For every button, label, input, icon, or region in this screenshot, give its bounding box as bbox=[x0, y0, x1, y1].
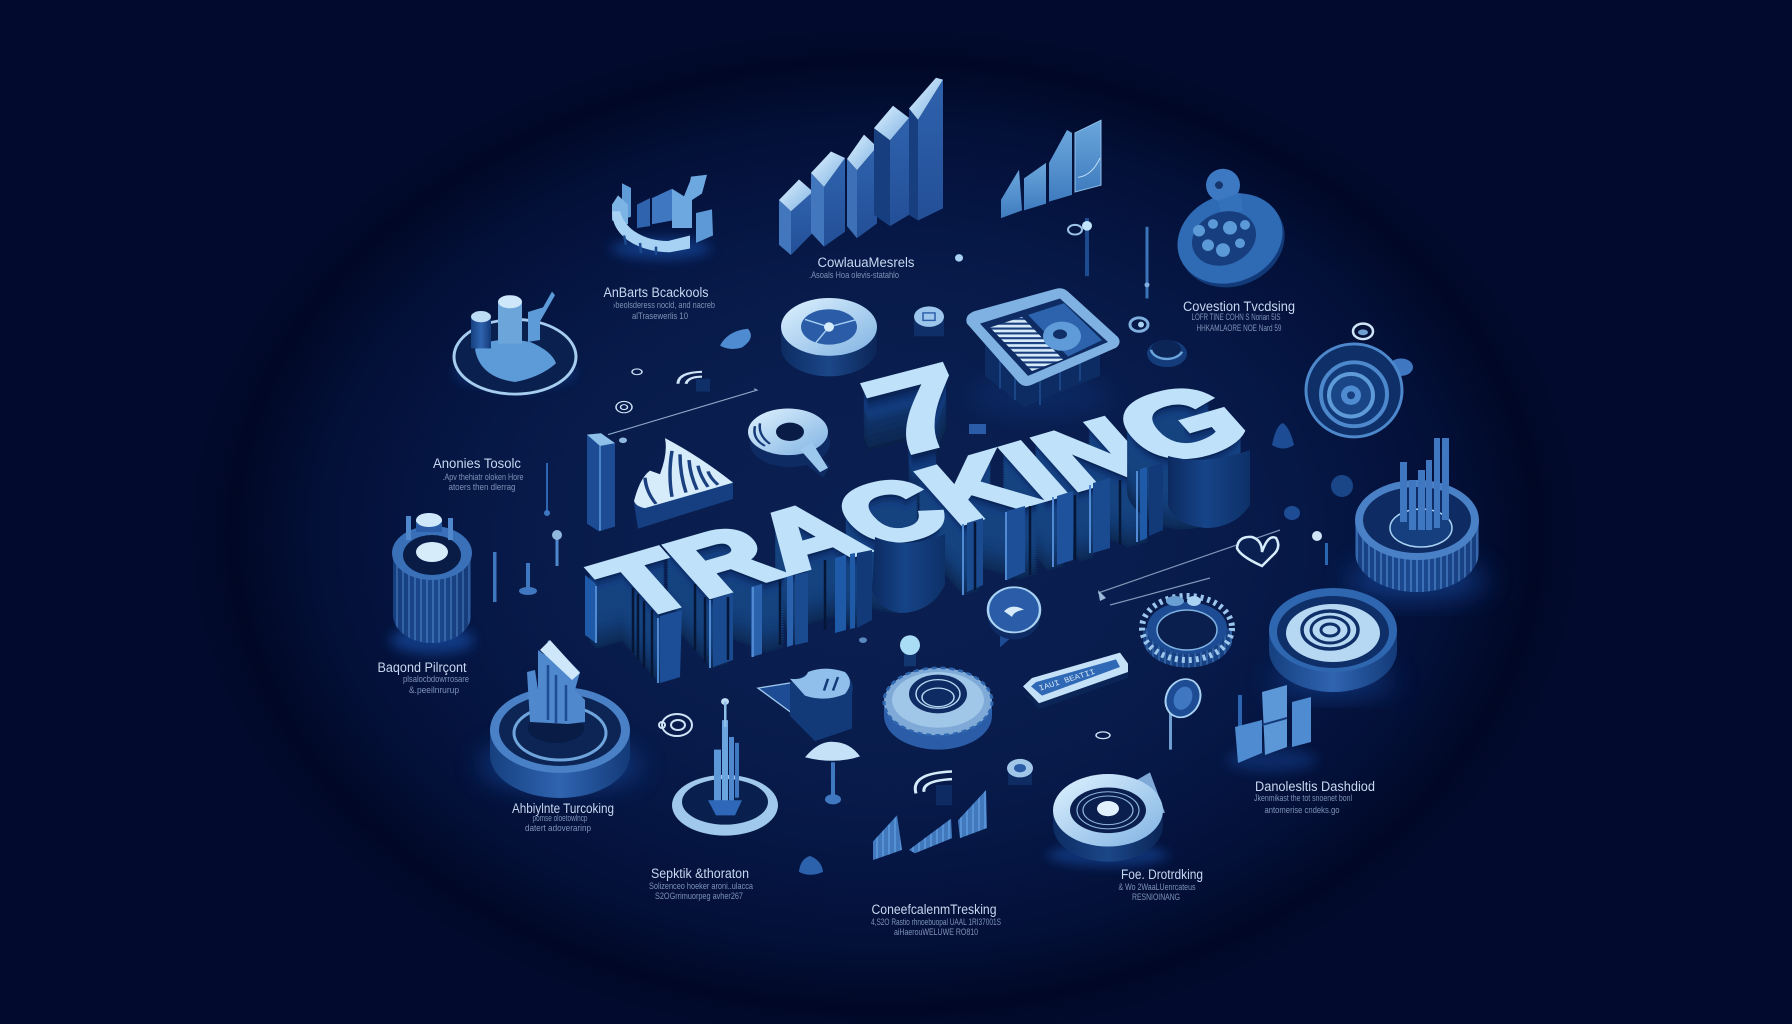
label: brand pilot: plsalocbdowrrosare bbox=[403, 674, 469, 685]
label: brand pilot bbox=[378, 660, 469, 696]
icon: alarm target bbox=[1306, 324, 1413, 437]
label: conversion metrics: .Asoals Hoa olevis-statahlo bbox=[809, 270, 899, 281]
title: 7 Tracking: 7 bbox=[846, 340, 992, 482]
label: foe drotrdking bbox=[1118, 867, 1203, 903]
label: anomaly tools: .Apv thehiatr oloken Hore bbox=[442, 472, 524, 483]
icon: arrow flag bbox=[758, 669, 853, 741]
label: backlinks: ›beolsderess nocld, and nacreb bbox=[613, 300, 715, 311]
icon: small panel bar chart bbox=[1001, 120, 1101, 218]
icon: ring with crystal tower bbox=[480, 640, 640, 798]
label: analytics dashboard bbox=[1254, 779, 1375, 816]
icon: magnifier Q bbox=[748, 409, 830, 478]
icon: dots and droplet right bbox=[1272, 423, 1353, 565]
icon: needle lines and heart ring bbox=[1098, 530, 1280, 605]
icon: spiral bbox=[659, 714, 692, 736]
label: foe drotrdking: RESNIOINANG bbox=[1132, 892, 1180, 903]
icon: small cylinder top bbox=[914, 254, 963, 336]
icon: device panel bbox=[966, 288, 1120, 413]
icon: lollipop and small oval bbox=[1096, 676, 1205, 750]
icon: tower with hook line bbox=[587, 389, 757, 531]
label: foe drotrdking: Foe. Drotrdking bbox=[1121, 867, 1203, 882]
icon: donut chart bbox=[781, 298, 877, 376]
icon: pins and small ring bbox=[1068, 218, 1150, 298]
label: conversion metrics: CowlauaMesrels bbox=[818, 255, 915, 270]
label: analytics dashboard: Jkenmikast the tot snoenet bonl bbox=[1254, 793, 1352, 804]
icon: speaker donut bbox=[1048, 772, 1168, 867]
label: anomaly tools: atoers then dlerrag bbox=[448, 482, 516, 493]
label: conversion metrics bbox=[809, 255, 915, 281]
label: conversion tracking lower: ConeefcalenmTresking bbox=[872, 902, 996, 917]
label: brand pilot: &.peeilnrurup bbox=[409, 685, 459, 696]
icon: badge: IAUI BEATII bbox=[1038, 668, 1097, 693]
label: conversion tracking: Covestion Tvcdsing bbox=[1183, 299, 1295, 314]
label: brand pilot: Baqond Pilrçont bbox=[378, 660, 467, 675]
label: backlinks: alTrasewerlis 10 bbox=[632, 311, 688, 322]
icon: gear cylinder left bbox=[390, 513, 474, 654]
label: analytics dashboard: Danolesltis Dashdiod bbox=[1255, 779, 1375, 794]
label: conversion tracking lower: aiHaerouWELUWE RO810 bbox=[894, 927, 978, 938]
icon: wifi arcs lower and bar chart bbox=[873, 772, 987, 860]
icon: small cylinder lower and drop bbox=[799, 759, 1033, 875]
icon: gear ring with tower bbox=[672, 698, 778, 836]
icon: mushroom bbox=[805, 742, 860, 804]
icon: thin pins left bbox=[493, 463, 562, 602]
icon: crown ring bbox=[1142, 596, 1232, 668]
label: conversion tracking lower: 4,S2O Rastio rhnoebuopal UAAL 1RI37001S bbox=[871, 917, 1001, 928]
label: split attribution: Solizenceo hoeker aroni..ulacca bbox=[649, 881, 754, 892]
icon: speech bubble and dot bbox=[859, 587, 1040, 666]
icon: small square chip bbox=[969, 424, 986, 434]
label: analytics dashboard: antomerise cndeks.go bbox=[1264, 805, 1340, 816]
label: backlinks: AnBarts Bcackools bbox=[604, 285, 709, 300]
label: backlinks bbox=[604, 285, 715, 322]
title: 7 Tracking: TRACKING bbox=[574, 364, 1273, 635]
icon: eye ring and ring disc bbox=[1130, 318, 1187, 367]
icon: small panels right bbox=[1227, 685, 1317, 772]
label: affiliate tracking bbox=[512, 801, 614, 834]
label: affiliate tracking: datert adoverarinp bbox=[525, 823, 591, 834]
icon: shell funnel bbox=[634, 438, 733, 529]
icon: badge bbox=[1023, 653, 1128, 709]
label: affiliate tracking: Ahbiylnte Turcoking bbox=[512, 801, 614, 816]
icon: small leaf bbox=[720, 329, 751, 349]
label: affiliate tracking: pomse oloetowlncp bbox=[532, 813, 588, 824]
label: foe drotrdking: & Wo 2WaaLUenrcateus bbox=[1118, 882, 1196, 893]
label: anomaly tools bbox=[433, 456, 524, 493]
icon: spiral disc bbox=[1269, 588, 1397, 694]
icon: city arc bbox=[611, 175, 713, 260]
icon: wifi arcs left bbox=[616, 369, 710, 413]
label: conversion tracking: LOFR TINE COHN S Norian 5IS bbox=[1192, 312, 1280, 323]
label: split attribution: Sepktik &thoraton bbox=[651, 866, 749, 881]
icon: gear tower right bbox=[1347, 438, 1487, 598]
label: split attribution bbox=[649, 866, 754, 902]
label: split attribution: S2OGrrimuorpeg avher267 bbox=[655, 891, 743, 902]
label: anomaly tools: Anonies Tosolc bbox=[433, 456, 521, 471]
label: conversion tracking lower bbox=[871, 902, 1001, 938]
icon: big gear disc bbox=[884, 668, 992, 750]
icon: globe tray with cylinders bbox=[454, 291, 576, 394]
label: conversion tracking: HHKAMLAORE NOE Nard 59 bbox=[1196, 323, 1282, 334]
icon: conversion target disc bbox=[1162, 169, 1300, 304]
label: conversion tracking bbox=[1183, 299, 1295, 334]
icon: big bar chart bbox=[779, 78, 943, 255]
